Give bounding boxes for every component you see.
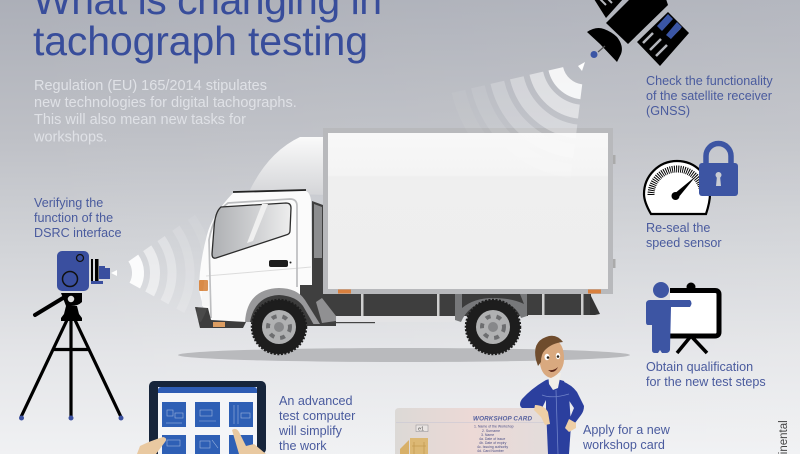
- icon: DSRC camera on tripod: [19, 251, 124, 420]
- label: DSRC: Verifying the: [34, 196, 103, 210]
- chassis: [322, 294, 600, 323]
- label: workshop card: [582, 423, 671, 452]
- label: test computer: the work: [279, 439, 327, 453]
- card fields: 4a. Date of issue: [479, 437, 505, 441]
- intro text: This will also mean new tasks for: [34, 112, 246, 128]
- label: workshop card: workshop card: [582, 438, 665, 452]
- label: DSRC: [34, 196, 122, 240]
- card fields: [474, 424, 514, 453]
- lock: [699, 144, 738, 196]
- tablet test computer: [137, 381, 266, 454]
- door frame: [209, 199, 297, 318]
- title: [33, 0, 382, 64]
- wind deflector: [249, 137, 325, 195]
- label: satellite receiver: Check the functionality: [646, 74, 773, 88]
- icon: satellite: [587, 0, 689, 66]
- window: [212, 203, 291, 258]
- headlight: [199, 280, 209, 306]
- e1 mark: e1: [418, 426, 424, 432]
- card fields: 4c. Issuing authority: [477, 445, 508, 449]
- label: qualification: [646, 360, 766, 389]
- label: test computer: An advanced: [279, 394, 353, 408]
- label: DSRC: function of the: [34, 211, 113, 225]
- front wheel: [252, 300, 306, 354]
- rear wheel: [466, 300, 520, 354]
- card fields: 2. Surname: [482, 429, 500, 433]
- label: qualification: Obtain qualification: [646, 360, 753, 374]
- label: speed sensor: Re-seal the: [646, 221, 710, 235]
- DSRC signal beam: [111, 217, 209, 320]
- satellite signal beam: [458, 62, 585, 191]
- ground shadow: [178, 348, 630, 362]
- title: tachograph testing: [33, 18, 368, 64]
- neck and collar: [548, 373, 561, 390]
- coverall torso: [546, 378, 571, 454]
- coverall left arm: [520, 380, 548, 408]
- tripod: [19, 293, 124, 420]
- card title: WORKSHOP CARD: [473, 416, 532, 422]
- label: DSRC: DSRC interface: [34, 226, 122, 240]
- intro text: workshops.: [33, 130, 107, 146]
- mechanic hand over card: [534, 405, 550, 425]
- icon: trainer at board: [646, 282, 719, 353]
- intro text: new technologies for digital tachographs.: [34, 95, 297, 111]
- workshop card: [395, 408, 548, 454]
- e1 mark: [416, 425, 428, 432]
- label: satellite receiver: [646, 74, 773, 118]
- box body: [323, 128, 616, 294]
- app tiles: [162, 402, 253, 454]
- label: test computer: test computer: [279, 409, 355, 423]
- label: qualification: for the new test steps: [646, 375, 766, 389]
- mechanic figure: [520, 336, 584, 454]
- label: satellite receiver: (GNSS): [646, 104, 690, 118]
- intro text: [33, 78, 297, 146]
- icon: speedometer with lock: [644, 144, 738, 214]
- front bumper: [195, 307, 246, 328]
- label: test computer: [278, 394, 355, 453]
- label: workshop card: Apply for a new: [583, 423, 671, 437]
- speedometer: [644, 161, 710, 214]
- intro text: Regulation (EU) 165/2014 stipulates: [34, 78, 267, 94]
- cab: [195, 190, 312, 328]
- truck: [195, 128, 616, 354]
- camera: [57, 251, 110, 291]
- right hand: [565, 419, 576, 432]
- head: [535, 336, 564, 378]
- rear wheel arch: [455, 294, 527, 322]
- label: test computer: will simplify: [278, 424, 343, 438]
- door handle: [269, 260, 292, 267]
- card fields: 1. Name of the Workshop: [474, 424, 514, 428]
- cab rear structure: [300, 201, 336, 326]
- coverall right arm: [562, 381, 584, 423]
- label: satellite receiver: of the satellite receiver: [646, 89, 772, 103]
- card fields: 4b. Date of expiry: [479, 441, 507, 445]
- card fields: 4d. Card Number: [477, 449, 505, 453]
- chip: [400, 438, 428, 454]
- hands: [137, 429, 266, 454]
- front wheel arch: [245, 288, 320, 326]
- label: speed sensor: speed sensor: [646, 236, 722, 250]
- card fields: 3. Name: [481, 433, 494, 437]
- label: speed sensor: [646, 221, 722, 250]
